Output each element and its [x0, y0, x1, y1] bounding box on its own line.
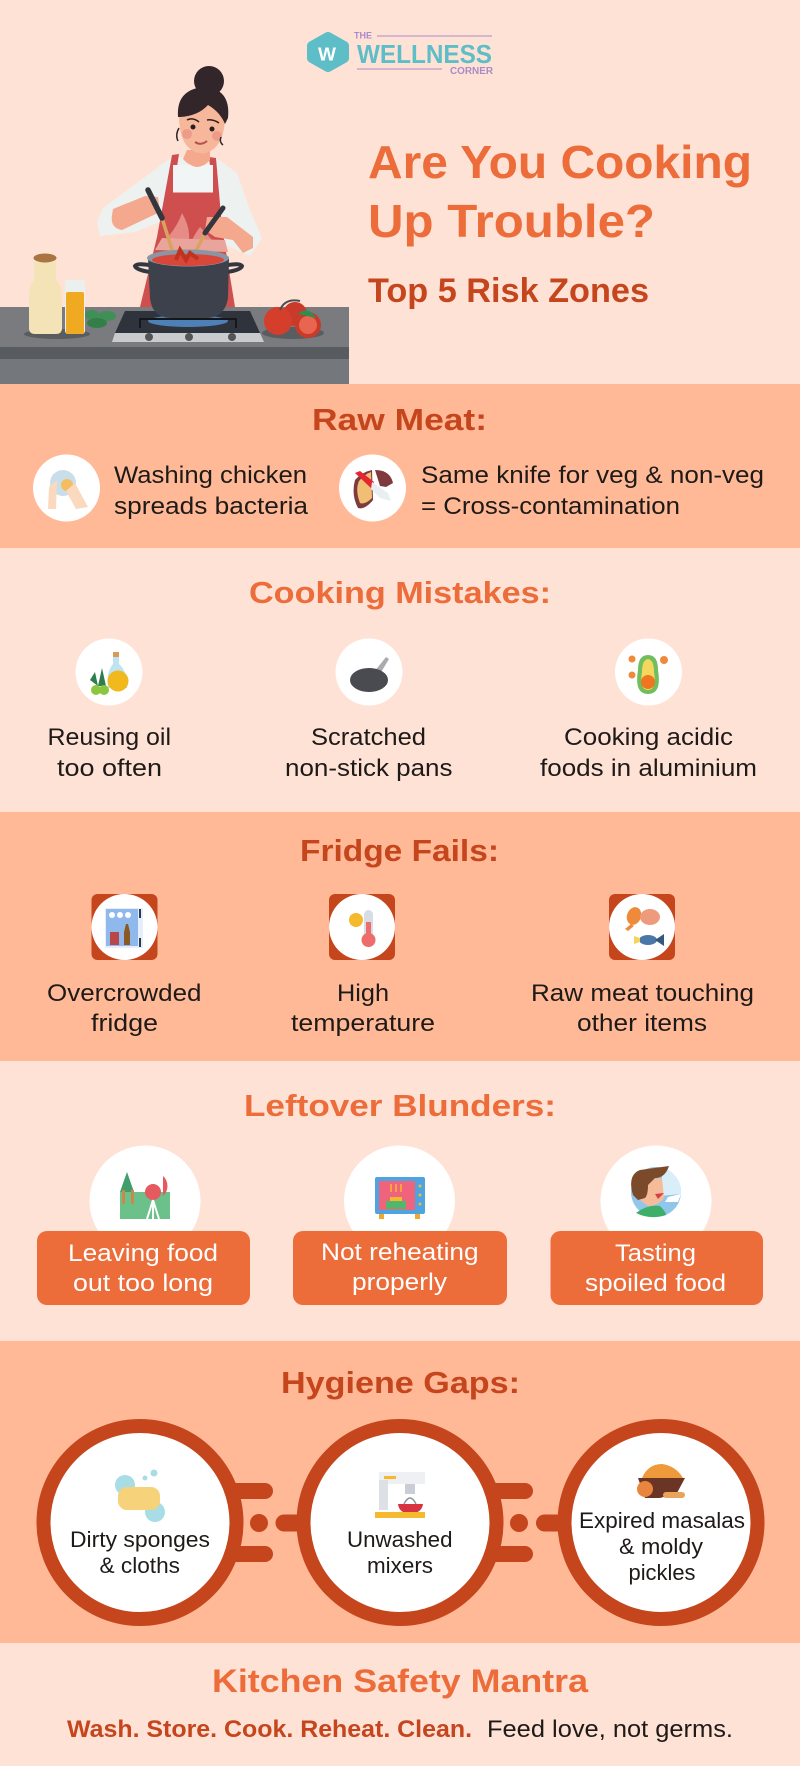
title: Are You Cooking: [368, 136, 752, 188]
mantra line: Wash. Store. Cook. Reheat. Clean.: [67, 1716, 472, 1743]
shirt chest: [173, 165, 213, 192]
item: not reheating: properly: [352, 1269, 447, 1296]
pot: [135, 250, 242, 318]
item: dirty sponges: & cloths: [100, 1553, 180, 1578]
item: unwashed mixers: [304, 1426, 496, 1619]
item: unwashed mixers: Unwashed: [347, 1527, 452, 1552]
item: dirty sponges: [44, 1426, 236, 1619]
panel: hygiene gaps: [0, 1341, 800, 1643]
item: acidic foods: foods in aluminium: [540, 755, 757, 782]
item: reusing oil: Reusing oil: [48, 724, 171, 751]
item: high temperature: [291, 894, 435, 1037]
panel: raw meat: [0, 384, 800, 548]
item: washing chicken: spreads bacteria: [114, 493, 309, 520]
item: overcrowded fridge: fridge: [91, 1010, 158, 1037]
steam: [168, 213, 189, 247]
panel: hero: [0, 0, 800, 384]
heading: raw meat: Raw Meat:: [312, 402, 487, 437]
tomatoes: [262, 300, 324, 339]
neck: [183, 150, 210, 167]
item: unwashed mixers: mixers: [367, 1553, 433, 1578]
item: raw meat touching: [531, 894, 754, 1037]
logo: The Wellness Corner: [312, 30, 494, 77]
item: dirty sponges: Dirty sponges: [70, 1527, 210, 1552]
item: raw meat touching: other items: [577, 1010, 707, 1037]
logo: The Wellness Corner: WELLNESS: [357, 39, 492, 69]
item: not reheating: Not reheating: [321, 1239, 479, 1266]
connector: second to third ring: [485, 1483, 570, 1562]
item: leaving food out: Leaving food: [68, 1240, 218, 1267]
arms: [112, 196, 160, 230]
item: overcrowded fridge: Overcrowded: [47, 980, 202, 1007]
item: reusing oil: too often: [57, 755, 162, 782]
title: Up Trouble?: [368, 195, 655, 247]
heading: leftover blunders: Leftover Blunders:: [244, 1088, 556, 1123]
item: same knife: = Cross-contamination: [421, 493, 680, 520]
subtitle: Top 5 Risk Zones: [368, 272, 649, 310]
apron: [140, 154, 235, 307]
item: leaving food out: [37, 1146, 250, 1305]
spoons: [162, 218, 173, 253]
item: expired masalas: pickles: [628, 1560, 696, 1585]
item: not reheating: [293, 1146, 507, 1305]
item: raw meat touching: Raw meat touching: [531, 980, 754, 1007]
illustration: woman cooking in kitchen: [0, 66, 349, 384]
shirt and sleeves: [97, 157, 262, 256]
logo: The Wellness Corner: THE: [354, 30, 372, 40]
mantra line: Feed love, not germs.: [487, 1716, 733, 1743]
item: washing chicken: [33, 454, 309, 522]
item: expired masalas: [564, 1426, 758, 1619]
item: tasting spoiled food: spoiled food: [585, 1270, 726, 1297]
item: scratched pans: Scratched: [311, 724, 426, 751]
heading: cooking mistakes: Cooking Mistakes:: [249, 575, 551, 610]
item: acidic foods: [540, 638, 757, 782]
head: [179, 100, 225, 154]
title: [368, 136, 752, 247]
logo: The Wellness Corner: W: [318, 44, 336, 64]
item: high temperature: High: [337, 980, 389, 1007]
counter: [0, 307, 349, 384]
heading: hygiene gaps: Hygiene Gaps:: [281, 1365, 520, 1400]
bottle and jar: [24, 254, 90, 339]
heading: kitchen safety mantra: Kitchen Safety Mantra: [212, 1663, 588, 1699]
panel: fridge fails: [0, 812, 800, 1061]
item: expired masalas: & moldy: [619, 1534, 703, 1559]
item: leaving food out: out too long: [73, 1270, 213, 1297]
item: tasting spoiled food: Tasting: [615, 1240, 696, 1267]
panel: leftover blunders: [0, 1061, 800, 1341]
item: overcrowded fridge: [47, 894, 202, 1037]
item: reusing oil: [48, 638, 171, 782]
item: washing chicken: Washing chicken: [114, 462, 307, 489]
item: same knife: Same knife for veg & non-veg: [421, 462, 764, 489]
panel: cooking mistakes: [0, 548, 800, 812]
woman: [97, 66, 262, 307]
herb leaves: [85, 310, 116, 328]
logo: The Wellness Corner: CORNER: [450, 66, 494, 77]
panel: kitchen safety mantra: [0, 1643, 800, 1766]
item: high temperature: temperature: [291, 1010, 435, 1037]
item: acidic foods: Cooking acidic: [564, 724, 733, 751]
item: expired masalas: Expired masalas: [579, 1508, 745, 1533]
stove: [112, 311, 264, 342]
item: scratched pans: non-stick pans: [285, 755, 452, 782]
item: scratched pans: [285, 638, 452, 782]
heading: fridge fails: Fridge Fails:: [300, 833, 499, 868]
connector: first to second ring: [225, 1483, 310, 1562]
mantra line: [67, 1716, 733, 1743]
item: same knife: [339, 454, 764, 522]
item: tasting spoiled food: [550, 1146, 763, 1305]
